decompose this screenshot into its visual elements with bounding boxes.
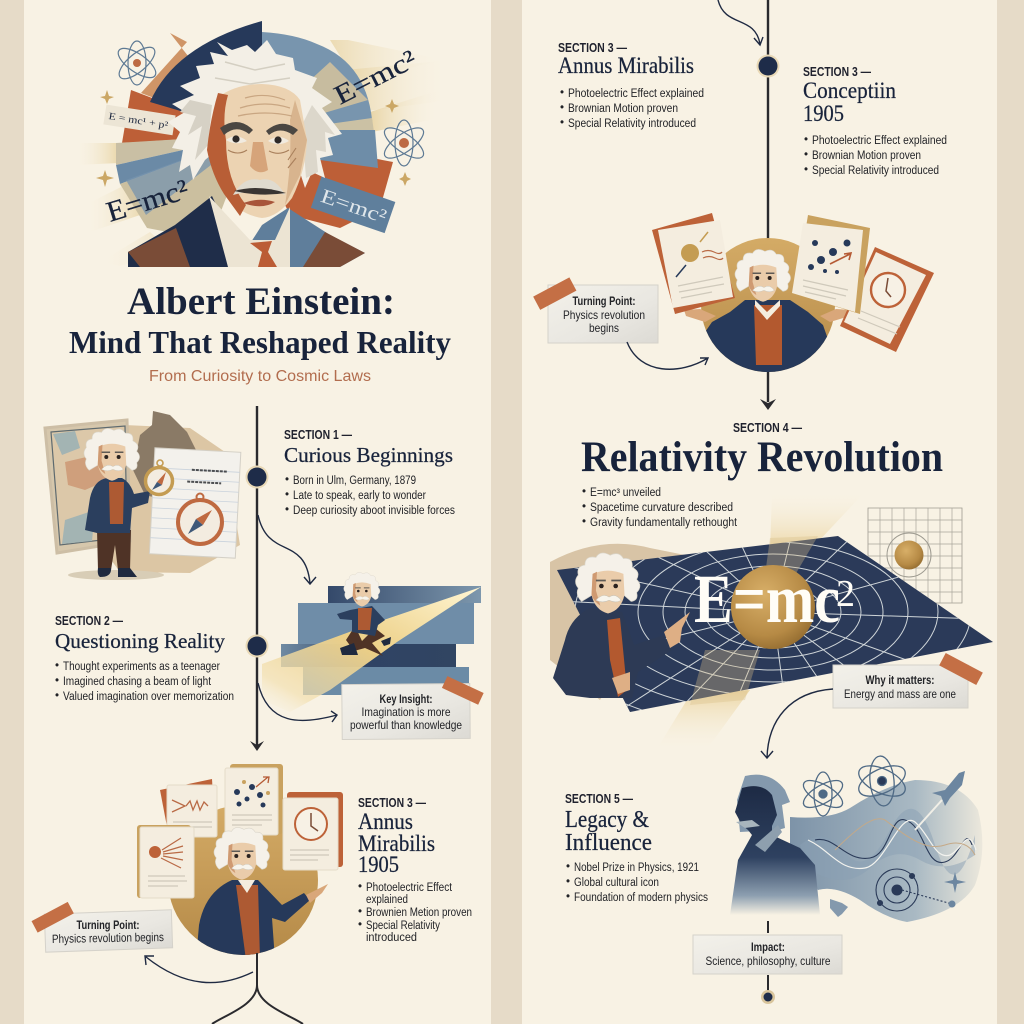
- section 3 text: Conception 1905: Photoelectric Effect explained: [812, 135, 947, 147]
- figure: young Einstein: [68, 428, 164, 580]
- section 4 bullets: •: [582, 516, 586, 528]
- running figure: [337, 572, 391, 656]
- section 3 text: Annus Mirabilis: Brownian Motion proven: [568, 103, 678, 115]
- section 3 text: Annus Mirabilis: •: [560, 117, 564, 129]
- beige backdrop: [550, 544, 690, 700]
- callout: turning point right: Physics revolution: [563, 308, 645, 322]
- map: [45, 420, 130, 553]
- formula lower left: E=mc²: [103, 173, 193, 229]
- formula: E=mc: [694, 561, 840, 637]
- burst: orange wedge: [141, 33, 188, 98]
- section 5 text: [565, 792, 708, 904]
- section 3 text: Conception 1905: •: [804, 149, 808, 161]
- section 3 text: left column: SECTION 3 —: [358, 796, 426, 810]
- callout: impact: Science, philosophy, culture: [706, 954, 831, 968]
- section 4 bullets: •: [582, 486, 586, 498]
- section 5 text: Influence: [565, 830, 652, 856]
- card: clock: [283, 792, 343, 870]
- timeline fork: [212, 953, 303, 1024]
- section 3 text: left column: Annus: [358, 809, 413, 834]
- paper strip E=mc2: E = mc¹ + p²: [108, 111, 169, 131]
- section 5 text: •: [566, 876, 570, 888]
- burst: blue right wedge: [262, 32, 372, 124]
- sparkles: [96, 90, 411, 187]
- section 1 text: Deep curiosity aboot invisible forces: [293, 505, 455, 517]
- callout: impact: [693, 935, 842, 974]
- section 3 text: Annus Mirabilis: [558, 41, 704, 130]
- section 3 text: left column: •: [358, 919, 362, 931]
- section 2 text: Thought experiments as a teenager: [63, 661, 220, 673]
- title: [69, 280, 451, 360]
- section 3 text: Conception 1905: [803, 65, 947, 177]
- section 4 header: SECTION 4 —: [733, 421, 802, 435]
- golden mass: [731, 565, 815, 649]
- callout: why it matters: Energy and mass are one: [844, 687, 956, 701]
- arrow: into right column: [718, 0, 763, 45]
- figure: presenting Einstein: [196, 880, 310, 960]
- burst: khaki band: [312, 62, 368, 112]
- callout: turning point right: begins: [589, 321, 619, 335]
- section 2 text: •: [55, 675, 59, 687]
- section 3 text: Annus Mirabilis: Annus Mirabilis: [558, 53, 694, 78]
- illustration: spacetime and E=mc2: 2: [836, 573, 855, 615]
- section 5 text: Global cultural icon: [574, 877, 659, 889]
- section 4 bullets: E=mc³ unveiled: [590, 487, 661, 499]
- callout: key insight: Imagination is more: [362, 705, 451, 719]
- blue banner E=mc2: [311, 177, 395, 233]
- section 4 bullets: [582, 486, 738, 529]
- section 3 text: Conception 1905: Conceptiin: [803, 78, 896, 103]
- illustration: Annus Mirabilis left: [137, 764, 343, 960]
- section 3 text: left column: Mirabilis: [358, 831, 435, 856]
- arrow: to key insight: [258, 683, 337, 722]
- section 3 text: Annus Mirabilis: •: [560, 102, 564, 114]
- section 5 text: Foundation of modern physics: [574, 892, 708, 904]
- title: Mind That Reshaped Reality: [69, 324, 451, 360]
- section 2 text: SECTION 2 —: [55, 614, 123, 628]
- Germany silhouette: [133, 411, 198, 500]
- card: particles: [792, 215, 870, 314]
- section 1 text: •: [285, 504, 289, 516]
- section 3 text: left column: Brownien Metion proven: [366, 907, 472, 919]
- timeline end node: [761, 921, 775, 1004]
- section 5 text: Nobel Prize in Physics, 1921: [574, 862, 699, 874]
- section 1 text: [284, 428, 455, 517]
- compass orange: [178, 494, 222, 544]
- section 5 text: Legacy &: [565, 807, 649, 833]
- section 2 text: Valued imagination over memorization: [63, 691, 234, 703]
- arrow: section 1 to beam: [258, 515, 316, 584]
- burst: khaki band lower: [334, 118, 374, 130]
- callout: why it matters: Why it matters:: [866, 673, 934, 687]
- section 3 text: Conception 1905: Special Relativity introduced: [812, 165, 939, 177]
- panel: left column: [24, 0, 491, 1024]
- callout: turning point right: Turning Point:: [572, 294, 636, 308]
- section 3 text: Conception 1905: •: [804, 134, 808, 146]
- warped sheet: [557, 536, 993, 712]
- section 2 text: [55, 614, 234, 703]
- light beam: [262, 587, 481, 712]
- section 3 text: Conception 1905: Brownian Motion proven: [812, 150, 921, 162]
- callout: key insight: [342, 676, 484, 740]
- blue banner E=mc2: E=mc²: [318, 185, 389, 228]
- callout: key insight: Key Insight:: [380, 692, 432, 706]
- sparkle: [944, 872, 966, 893]
- section 2 text: Imagined chasing a beam of light: [63, 676, 212, 688]
- section 1 text: Late to speak, early to wonder: [293, 490, 426, 502]
- section 3 text: Annus Mirabilis: Special Relativity introduced: [568, 118, 696, 130]
- gold disc: [168, 805, 318, 955]
- section 3 text: left column: Photoelectric Effect: [366, 882, 453, 894]
- puzzle piece: [830, 899, 848, 917]
- burst: blue wedge right: [320, 130, 378, 168]
- burst: khaki wedge: [116, 139, 182, 165]
- gold disc: [701, 238, 835, 372]
- section 5 text: •: [566, 861, 570, 873]
- illustration: spacetime and E=mc2: [550, 508, 993, 730]
- section 3 text: left column: Special Relativity: [366, 920, 440, 932]
- callout: why it matters: [833, 653, 983, 708]
- section 3 text: left column: [358, 796, 472, 944]
- wave lines: [815, 820, 972, 863]
- section 3 text: Conception 1905: 1905: [803, 101, 844, 126]
- card: clock: [840, 247, 934, 352]
- figure: pointing Einstein: [553, 553, 690, 698]
- illustration: chasing a beam of light: [262, 572, 481, 712]
- compass gold: [146, 460, 172, 494]
- notepaper: [149, 448, 241, 558]
- callout: turning point left: [32, 902, 173, 952]
- section 1 text: •: [285, 489, 289, 501]
- atom one: [799, 772, 847, 816]
- section 2 text: Questioning Reality: [55, 629, 225, 653]
- card: photon: [652, 213, 735, 314]
- arrow: to turning point: [145, 956, 253, 983]
- panel: right column: [522, 0, 997, 1024]
- illustration: legacy silhouette and waves: [730, 755, 982, 922]
- timeline: left column: [246, 406, 268, 751]
- section 3 text: Conception 1905: •: [804, 164, 808, 176]
- section 3 text: left column: introduced: [366, 932, 417, 944]
- torn paper: [100, 425, 240, 573]
- title: Albert Einstein:: [127, 280, 395, 323]
- callout: impact: Impact:: [751, 940, 785, 954]
- section 4 header: Relativity Revolution: [581, 434, 943, 481]
- section 3 text: left column: 1905: [358, 852, 399, 877]
- atom top left: [118, 40, 156, 86]
- subtitle: From Curiosity to Cosmic Laws: [149, 368, 371, 385]
- callout: key insight: powerful than knowledge: [350, 718, 462, 732]
- card: spectrum: [160, 779, 217, 837]
- illustration: map and young Einstein: [45, 411, 241, 580]
- wave: [790, 780, 982, 922]
- small grid with sphere: [868, 508, 962, 603]
- silhouette: [737, 775, 790, 832]
- section 4 bullets: •: [582, 501, 586, 513]
- card: brownian: [225, 764, 283, 835]
- atom right: [384, 119, 424, 167]
- section 1 text: Born in Ulm, Germany, 1879: [293, 475, 416, 487]
- burst: rust wedge right: [286, 159, 393, 228]
- figure: [703, 300, 830, 372]
- section 2 text: •: [55, 660, 59, 672]
- timeline: right column: [756, 0, 780, 410]
- burst: blue wedge left: [116, 150, 183, 184]
- burst: blue wedge lower left: [127, 157, 211, 215]
- arrow: why it matters to legacy: [761, 689, 833, 758]
- callout: turning point left: Turning Point:: [76, 918, 140, 932]
- section 3 text: left column: •: [358, 881, 362, 893]
- orbit diagram: [876, 869, 956, 911]
- light rays: [770, 490, 862, 550]
- rocket: [915, 771, 965, 830]
- section 1 text: Curious Beginnings: [284, 443, 453, 467]
- section 1 text: •: [285, 474, 289, 486]
- section 3 text: left column: explained: [366, 894, 408, 906]
- burst: navy arc: [150, 21, 262, 111]
- section 5 text: SECTION 5 —: [565, 792, 633, 806]
- section 3 text: Conception 1905: SECTION 3 —: [803, 65, 871, 79]
- section 3 text: left column: •: [358, 906, 362, 918]
- atom two: [854, 755, 910, 807]
- paper strip E=mc2: [103, 105, 176, 135]
- section 5 text: •: [566, 891, 570, 903]
- arrow: turning point to figure: [627, 342, 708, 369]
- portrait illustration: [92, 21, 424, 267]
- callout: turning point right: [533, 277, 658, 343]
- face: [207, 84, 307, 218]
- section 1 text: SECTION 1 —: [284, 428, 352, 442]
- section 3 text: Annus Mirabilis: •: [560, 87, 564, 99]
- section 3 text: Annus Mirabilis: SECTION 3 —: [558, 41, 627, 55]
- light over sheet: [690, 536, 818, 705]
- section 3 text: Annus Mirabilis: Photoelectric Effect explained: [568, 88, 704, 100]
- callout: turning point left: Physics revolution begins: [52, 930, 164, 946]
- burst: khaki wedge lower: [120, 158, 226, 232]
- hair back: [168, 40, 342, 188]
- section 4 bullets: Gravity fundamentally rethought: [590, 517, 738, 529]
- section 4 bullets: Spacetime curvature described: [590, 502, 733, 514]
- burst: rust wedge: [122, 90, 184, 143]
- jacket: [128, 196, 365, 267]
- illustration: Einstein holding cards: [652, 213, 934, 372]
- formula top right: E=mc²: [329, 44, 421, 110]
- card: photoelectric: [137, 825, 194, 898]
- section 2 text: •: [55, 690, 59, 702]
